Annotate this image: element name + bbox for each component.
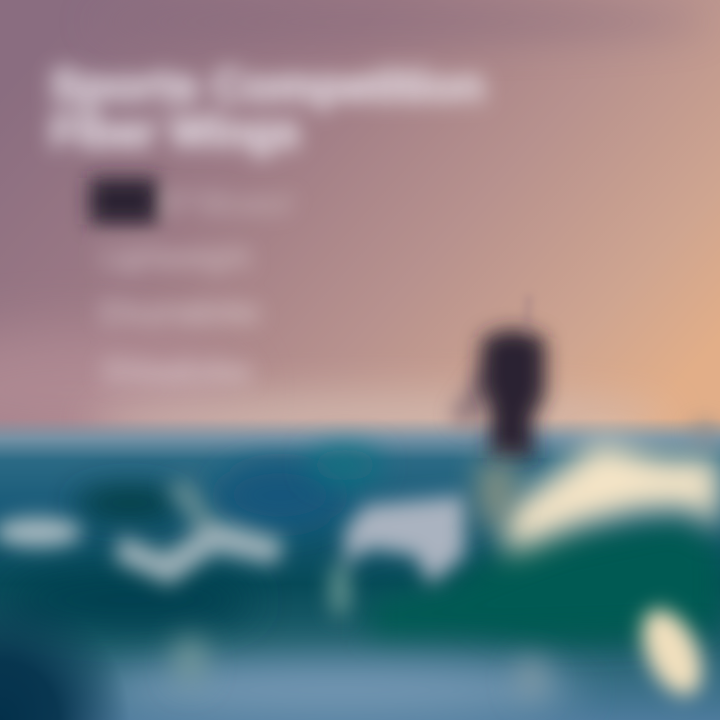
wave foam: lower right patch (630, 600, 714, 704)
distant rock at horizon (691, 420, 719, 444)
title: Fiber Wings (50, 106, 300, 157)
background: ocean waves (0, 418, 720, 720)
list item 4: Stable (100, 355, 252, 388)
wave foam: left breakers (0, 478, 285, 585)
title (50, 60, 485, 157)
list item 1 with dark highlighted badge (90, 178, 295, 224)
list item 2: Lightweight (100, 241, 251, 274)
wave foam: right crest (505, 440, 720, 555)
title: Sports Competition (50, 60, 485, 111)
wave foam: small lower highlights (176, 636, 545, 698)
list item 1 with dark highlighted badge: Fiber (165, 187, 295, 220)
wave foam: center spray (329, 495, 465, 618)
list of items (90, 178, 295, 388)
list item 3: Durable (100, 296, 260, 329)
surfer silhouette (450, 295, 545, 525)
